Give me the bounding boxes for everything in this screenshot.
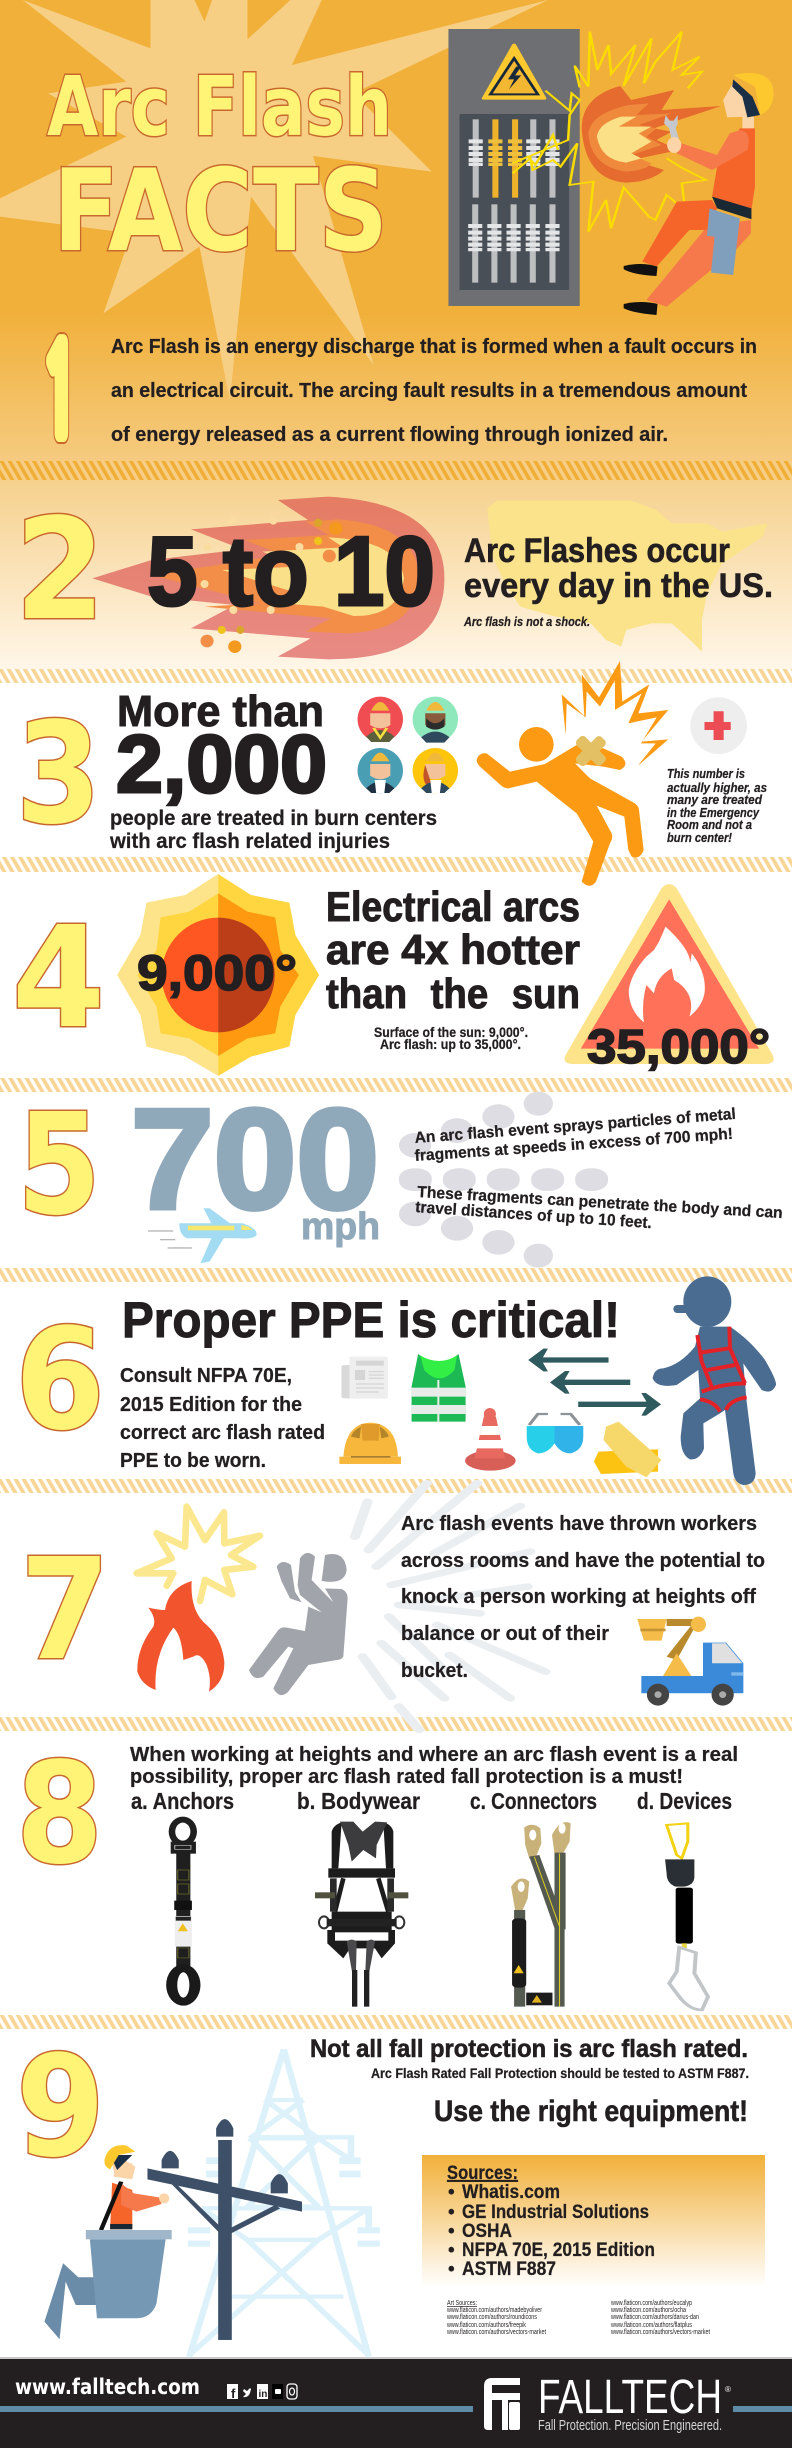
fact 3 side note: burn center! xyxy=(667,830,733,845)
icon: hard hat xyxy=(339,1423,401,1464)
number 6: 6 xyxy=(15,1299,105,1462)
utility pole xyxy=(147,2119,302,2340)
fact 2 text xyxy=(463,532,773,629)
art sources: www.flaticon.com/authors/darius-dan xyxy=(610,2314,699,2321)
social icons xyxy=(227,2384,297,2401)
title: Arc Flash xyxy=(47,60,392,155)
sources box: NFPA 70E, 2015 Edition xyxy=(462,2240,655,2261)
art sources: Art Sources: xyxy=(447,2300,477,2307)
fact 1 text: of energy released as a current flowing through ionized air. xyxy=(111,424,668,446)
art sources: www.flaticon.com/authors/ocha xyxy=(610,2307,686,2314)
harness xyxy=(315,1822,408,2007)
panel: fact 4 graphics xyxy=(117,874,774,1076)
fact 8 text: When working at heights and where an arc flash event is a real xyxy=(130,1744,738,1766)
electrical panel xyxy=(448,29,580,306)
footer xyxy=(0,2357,792,2448)
figure wearing harness xyxy=(653,1276,776,1485)
FallTech logo: Fall Protection. Precision Engineered. xyxy=(538,2417,722,2434)
worker xyxy=(624,73,774,315)
sources box: • xyxy=(448,2240,455,2261)
text: 1 xyxy=(42,332,78,453)
sources box: OSHA xyxy=(462,2221,512,2242)
header starburst xyxy=(0,0,548,400)
bucket truck xyxy=(637,1617,743,1706)
fact 7 text xyxy=(401,1513,765,1682)
panel: fact 5 graphics xyxy=(148,1092,608,1268)
fact 6 heading: Proper PPE is critical! xyxy=(122,1292,620,1348)
number 2: 2 xyxy=(15,489,105,652)
fact 7 text: across rooms and have the potential to xyxy=(401,1550,765,1572)
fact 3 side note xyxy=(667,766,767,845)
fact 3 text: people are treated in burn centers xyxy=(110,807,437,830)
connector lanyard xyxy=(511,1822,571,2007)
fact 6 text: 2015 Edition for the xyxy=(120,1394,302,1416)
FallTech logo: ® xyxy=(725,2385,731,2394)
arrows xyxy=(528,1349,661,1416)
fact 7 text: Arc flash events have thrown workers xyxy=(401,1513,757,1535)
fact 6 text: PPE to be worn. xyxy=(120,1450,266,1472)
700 mph: 700 xyxy=(131,1080,379,1239)
comet flame xyxy=(92,497,444,659)
hazard triangle with flame xyxy=(565,884,774,1064)
fact 3 side note: actually higher, as xyxy=(667,780,767,795)
lightning arcs xyxy=(513,32,706,232)
icon: safety goggles xyxy=(527,1414,583,1453)
fact 4 heading: are 4x hotter xyxy=(326,926,580,973)
fireball xyxy=(582,86,721,183)
art sources: www.flaticon.com/authors/flatplus xyxy=(610,2322,692,2329)
art sources: www.flaticon.com/authors/vectors-market xyxy=(610,2329,710,2336)
equipment labels: d. Devices xyxy=(637,1788,732,1814)
map of the US xyxy=(487,501,768,652)
panel: fact 9 graphics xyxy=(44,2049,380,2357)
art sources xyxy=(446,2300,710,2336)
fact 9 text: Use the right equipment! xyxy=(434,2095,748,2128)
fact 4 heading xyxy=(326,883,580,1017)
spray of fragments xyxy=(399,1092,608,1268)
fact 9 text: Not all fall protection is arc flash rated. xyxy=(310,2035,748,2063)
title: FACTS xyxy=(53,145,388,277)
social icons: f xyxy=(231,2386,236,2401)
sources box xyxy=(422,2155,765,2287)
fact 8 text xyxy=(130,1744,738,1788)
panel: fall protection anchor, connector, device xyxy=(166,1817,708,2010)
fact 3 text xyxy=(109,687,437,853)
fact 6 text: correct arc flash rated xyxy=(120,1422,325,1444)
number 1 xyxy=(42,332,78,453)
fact 4 temperature labels: 9,000° xyxy=(137,945,297,1001)
fact 4 heading: Electrical arcs xyxy=(326,883,580,930)
icon: gloves xyxy=(594,1422,662,1477)
fact 5 text: travel distances of up to 10 feet. xyxy=(415,1199,652,1232)
medical cross icon xyxy=(690,697,747,754)
fact 3 side note: many are treated xyxy=(667,792,763,807)
fact 5 text xyxy=(414,1106,783,1232)
fact 2 big number: 5 to 10 xyxy=(147,516,435,626)
sources box: • xyxy=(448,2202,455,2223)
fact 3 text: 2,000 xyxy=(116,719,327,810)
injured figure with burst xyxy=(477,661,668,886)
fact 3 text: More than xyxy=(117,687,324,736)
art sources: www.flaticon.com/authors/vectors-market xyxy=(446,2329,546,2336)
art sources: www.flaticon.com/authors/roundicons xyxy=(446,2314,537,2321)
fact 4 note: Arc flash: up to 35,000°. xyxy=(380,1036,521,1052)
illustration: electrical panel and worker xyxy=(448,29,774,315)
fact 5 text: These fragments can penetrate the body and can xyxy=(417,1184,783,1222)
tower insulators xyxy=(188,2157,380,2247)
fact 8 text: possibility, proper arc flash rated fall protection is a must! xyxy=(130,1766,683,1788)
fact 4 heading: than the sun xyxy=(326,970,580,1017)
fact 3 side note: This number is xyxy=(667,766,745,781)
700 mph: mph xyxy=(301,1206,380,1248)
fact 1 text: Arc Flash is an energy discharge that is formed when a fault occurs in xyxy=(111,336,757,358)
icon: safety vest xyxy=(412,1354,466,1422)
fact 6 text xyxy=(120,1365,325,1472)
panel: PPE icons xyxy=(339,1349,662,1477)
art sources: www.flaticon.com/authors/madebyoliver xyxy=(446,2307,543,2314)
panel: fact 2 graphics xyxy=(92,497,768,659)
fact 3 side note: in the Emergency xyxy=(667,805,760,820)
equipment labels: c. Connectors xyxy=(470,1788,597,1814)
number 3: 3 xyxy=(16,693,101,856)
number 5: 5 xyxy=(17,1084,101,1247)
self retracting device xyxy=(665,1823,708,2010)
icon: traffic cone xyxy=(465,1408,516,1471)
sources box: • xyxy=(448,2182,455,2203)
sources box: Sources: xyxy=(447,2163,518,2184)
fact 1 text: an electrical circuit. The arcing fault results in a tremendous amount xyxy=(111,380,747,402)
fact 5 text: An arc flash event sprays particles of metal xyxy=(414,1106,736,1147)
fact 1 text xyxy=(111,336,757,446)
fact 7 text: bucket. xyxy=(401,1660,468,1682)
fact 4 note xyxy=(374,1024,528,1052)
number 9: 9 xyxy=(16,2026,105,2189)
fact 2 text: Arc flash is not a shock. xyxy=(463,614,590,629)
art sources: www.flaticon.com/authors/eucalyp xyxy=(610,2300,692,2307)
sources box: GE Industrial Solutions xyxy=(462,2202,649,2223)
burst xyxy=(137,1507,260,1601)
fact 7 text: knock a person working at heights off xyxy=(401,1586,756,1608)
panel: fact 7 rays xyxy=(355,1483,545,1730)
fact 5 text: fragments at speeds in excess of 700 mph! xyxy=(414,1126,734,1165)
fact 9 text xyxy=(310,2035,749,2128)
fact 3 text: with arc flash related injuries xyxy=(109,830,390,853)
number 7: 7 xyxy=(20,1529,110,1692)
panel: fact 3 avatars and cross xyxy=(358,697,747,793)
fact 4 temperature labels xyxy=(137,945,770,1074)
fact 2 text: every day in the US. xyxy=(464,567,773,605)
icon: newspaper xyxy=(341,1357,388,1399)
flame xyxy=(137,1581,224,1692)
FallTech logo: FALLTECH xyxy=(538,2371,722,2424)
fact 9 text: Arc Flash Rated Fall Protection should be tested to ASTM F887. xyxy=(371,2065,749,2081)
worker avatars xyxy=(358,697,458,793)
title xyxy=(47,60,392,277)
anchor strap xyxy=(166,1817,200,2006)
fact 6 text: Consult NFPA 70E, xyxy=(120,1365,292,1387)
thrown figure xyxy=(249,1553,348,1695)
fact 4 temperature labels: 35,000° xyxy=(587,1021,770,1074)
airplane xyxy=(148,1208,257,1263)
equipment labels xyxy=(131,1788,732,1814)
fact 3 side note: Room and not a xyxy=(667,817,752,832)
FallTech logo xyxy=(484,2371,731,2434)
equipment labels: b. Bodywear xyxy=(297,1788,420,1814)
number 4: 4 xyxy=(12,897,105,1060)
sources box: • xyxy=(448,2221,455,2242)
divider stripe bands xyxy=(0,461,792,2029)
panel: fact 7 burst, flame, figure xyxy=(137,1507,348,1695)
equipment labels: a. Anchors xyxy=(131,1788,234,1814)
text: 1 xyxy=(42,332,78,453)
fact 2 text: Arc Flashes occur xyxy=(464,532,730,570)
fact 4 note: Surface of the sun: 9,000°. xyxy=(374,1024,528,1040)
social icons: in xyxy=(258,2389,267,2400)
art sources: www.flaticon.com/authors/freepik xyxy=(446,2322,526,2329)
transmission tower xyxy=(189,2049,369,2357)
fact 7 text: balance or out of their xyxy=(401,1623,609,1645)
sun icon xyxy=(117,874,319,1076)
worker in bucket xyxy=(44,2145,172,2339)
sources box: • xyxy=(448,2259,455,2280)
website: www.falltech.com xyxy=(15,2375,200,2399)
sources box: Whatis.com xyxy=(462,2182,560,2203)
sources box: ASTM F887 xyxy=(462,2259,556,2280)
number 8: 8 xyxy=(16,1733,103,1896)
